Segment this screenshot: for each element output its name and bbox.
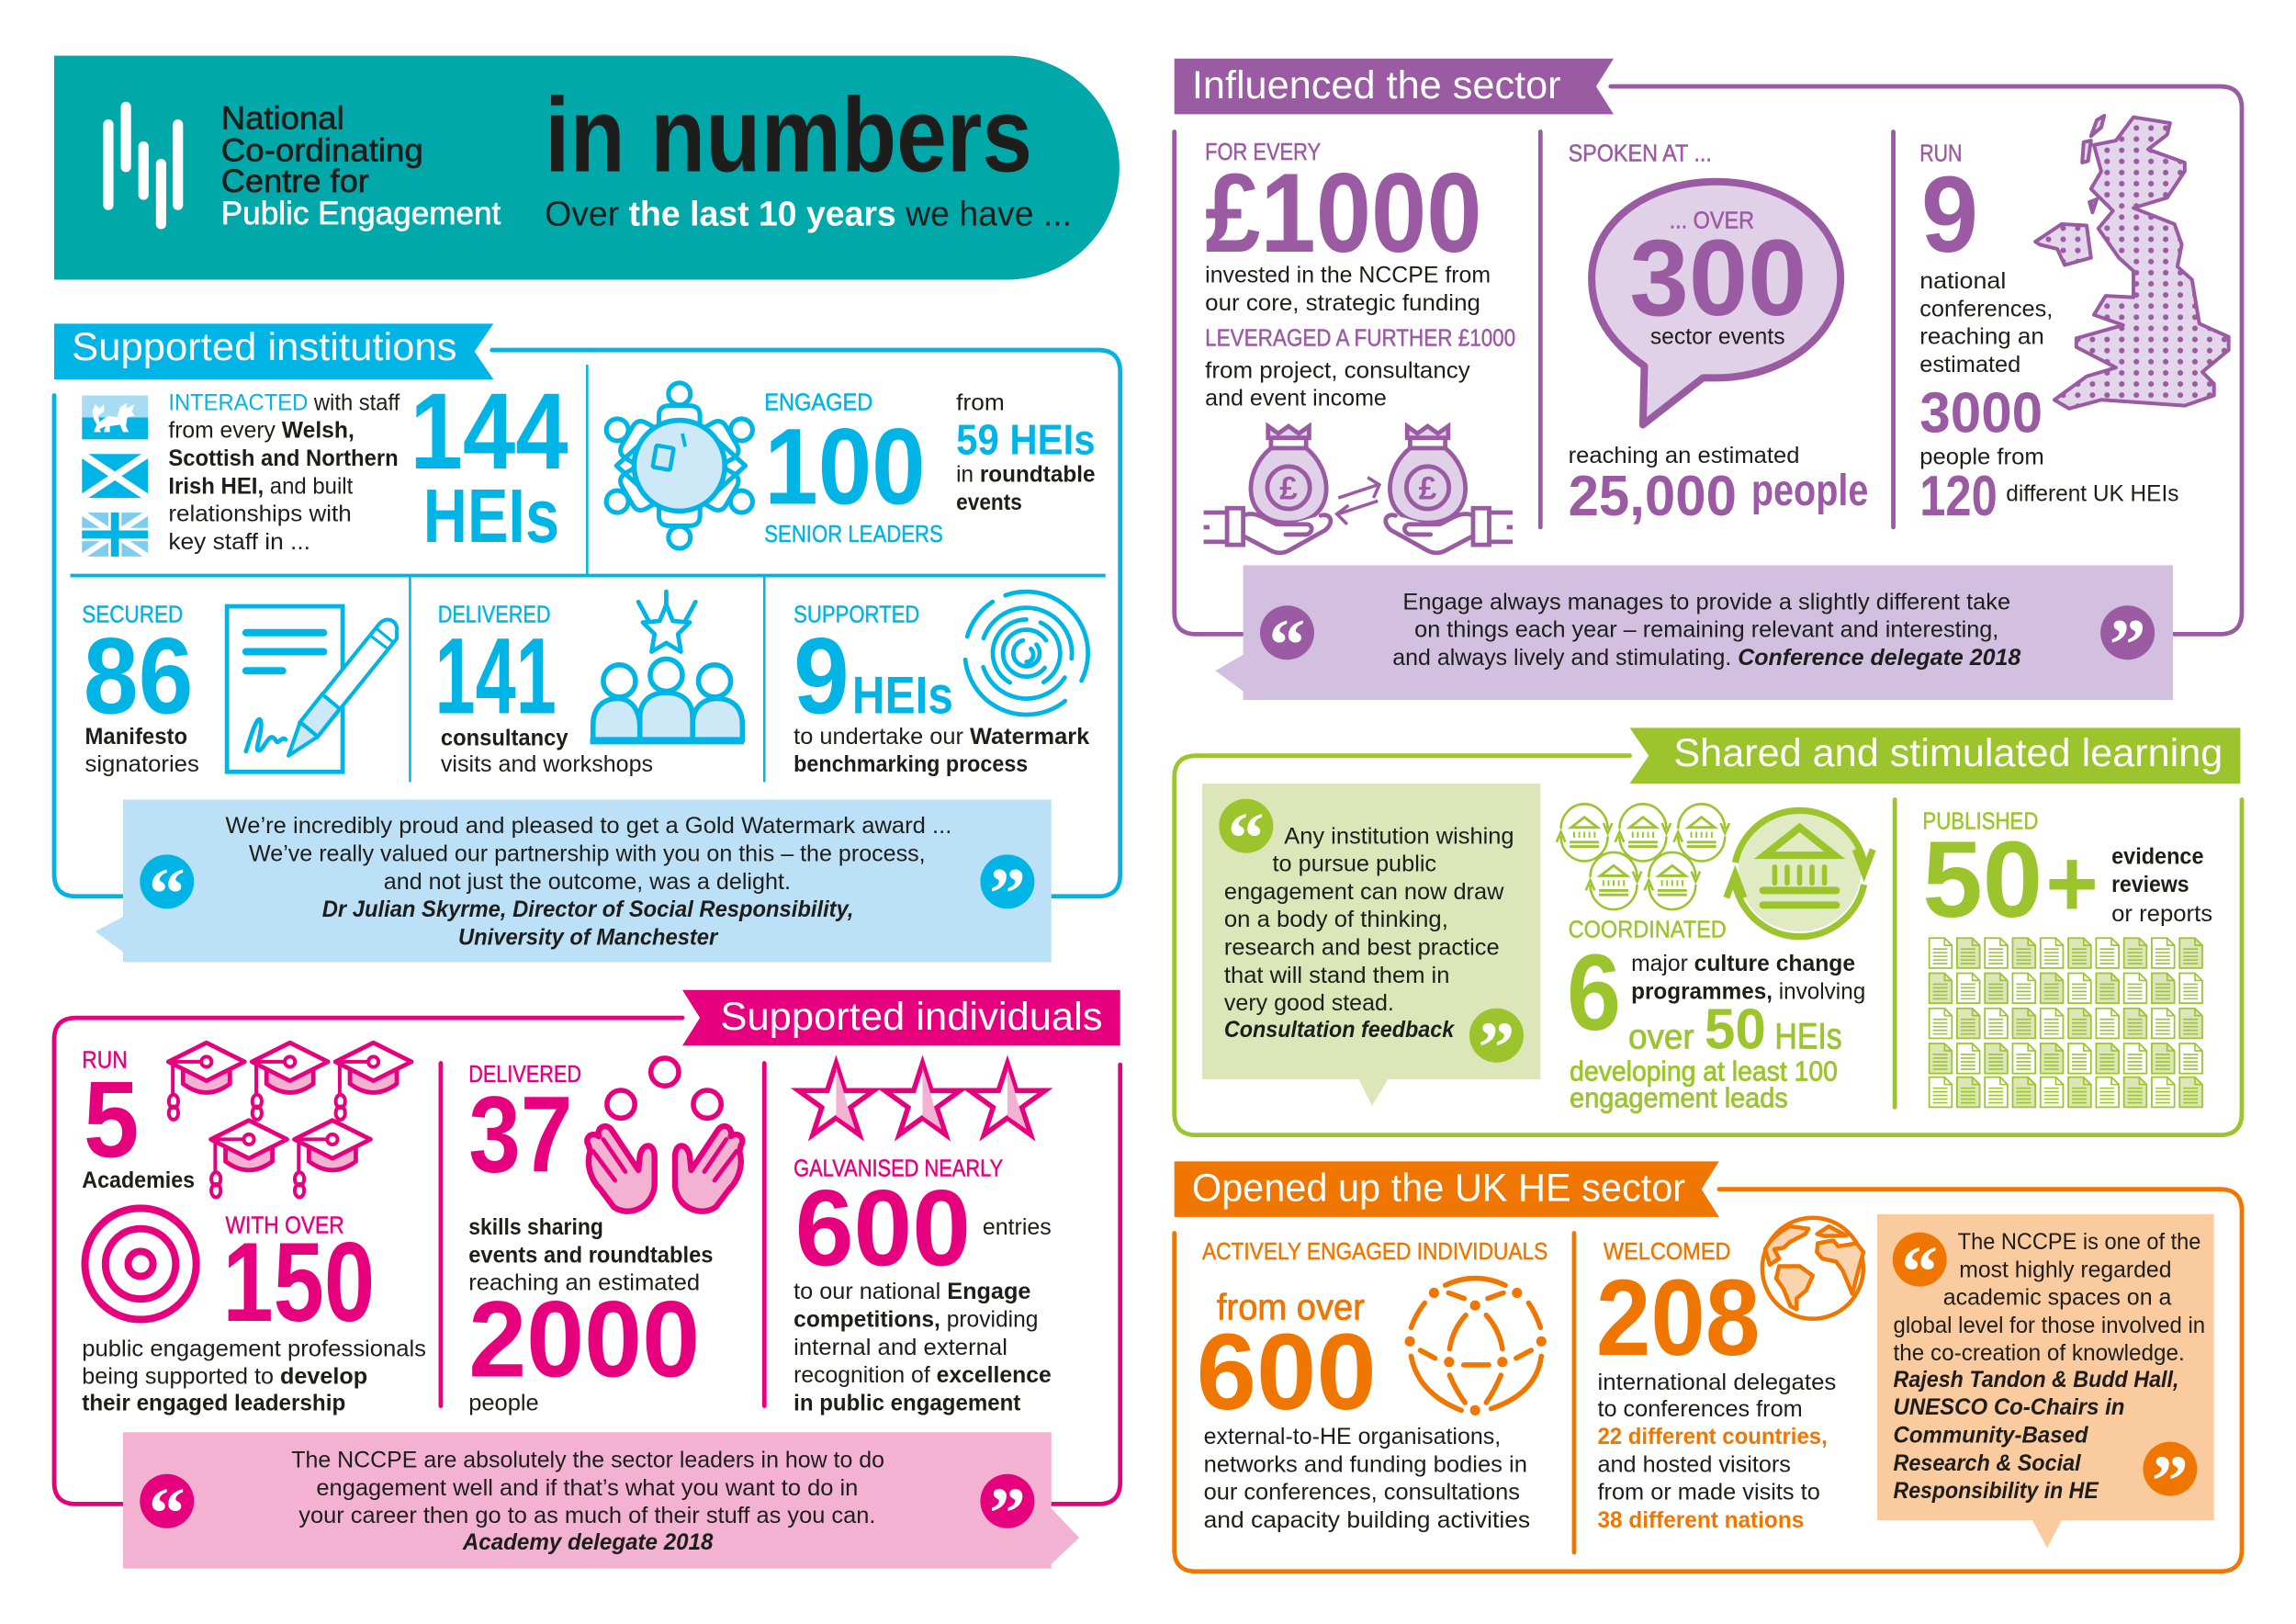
icon: roundtable — [598, 383, 761, 548]
quote text: the co-creation of knowledge. — [1894, 1341, 2185, 1366]
icon: money bags and hands — [1204, 426, 1513, 553]
stat: published 50+: 50 — [1922, 819, 2043, 941]
stat: delivered 141: 141 — [435, 615, 557, 737]
quote text: your career then go to as much of their stuff as you can. — [298, 1504, 875, 1528]
stat: for every £1000: £1000 — [1205, 151, 1482, 276]
number: 144 HEIs — [410, 371, 568, 558]
stat: delivered 141: visits and workshops — [441, 752, 653, 777]
quote text: engagement well and if that’s what you want to do in — [316, 1476, 858, 1501]
icon: document and pen — [227, 606, 397, 772]
stat: from over 600: external-to-HE organisations, — [1204, 1425, 1501, 1449]
quote text: We’ve really valued our partnership with you on this – the process, — [249, 841, 926, 866]
stat: delivered 37: events and roundtables — [468, 1243, 713, 1268]
stat: from over 600: from over — [1217, 1288, 1365, 1328]
text: interacted: Irish HEI, and built — [168, 474, 353, 499]
quote text: Dr Julian Skyrme, Director of Social Responsibility, — [322, 897, 854, 922]
stat: galvanised nearly 600: 600 — [795, 1168, 971, 1290]
stat: galvanised nearly 600: recognition of excellence — [793, 1363, 1052, 1388]
panel: supported individuals — [54, 990, 1120, 1569]
stat: run 5 academies — [82, 1047, 195, 1193]
stat: run 9 conferences — [1919, 141, 2178, 528]
quote marks — [1893, 1232, 2197, 1522]
stat: supported 9 HEIs: HEIs — [852, 666, 953, 725]
quote text: academic spaces on a — [1943, 1286, 2172, 1311]
quote text — [1224, 824, 1514, 1043]
text: interacted: from every Welsh, — [168, 419, 355, 444]
text: interacted: INTERACTED with staff — [168, 390, 400, 415]
stat: with over 150: their engaged leadership — [82, 1391, 345, 1415]
icon: juggling hands — [587, 1058, 742, 1212]
stat: with over 150: WITH OVER — [226, 1212, 344, 1238]
stat: secured 86 — [82, 603, 199, 777]
stat: engaged 100 senior leaders: ENGAGED — [764, 389, 872, 415]
stat: with over 150 — [82, 1212, 426, 1415]
stat: reaching 25,000 people: people — [1751, 467, 1868, 515]
quote text: We’re incredibly proud and pleased to get a Gold Watermark award ... — [226, 814, 951, 839]
stat: welcomed 208: WELCOMED — [1604, 1239, 1731, 1265]
stat: delivered 141: consultancy — [441, 727, 568, 751]
stat: welcomed 208: 208 — [1596, 1257, 1760, 1379]
stat: welcomed 208: from or made visits to — [1597, 1481, 1820, 1506]
text: interacted: Scottish and Northern — [168, 446, 399, 471]
quote marks — [1219, 798, 1524, 1088]
stat: coordinated 6: HEIs — [1774, 1017, 1842, 1057]
quote text: Research & Social — [1894, 1451, 2082, 1476]
organisation name: Co-ordinating — [221, 132, 423, 168]
quote text: Community-Based — [1894, 1423, 2088, 1448]
heading: supported individuals: Supported individuals — [720, 995, 1103, 1039]
stat: for every £1000: FOR EVERY — [1205, 140, 1321, 165]
stat: run 9 conferences: national — [1919, 269, 2006, 294]
text: interacted: key staff in ... — [168, 530, 310, 555]
quote text — [226, 814, 951, 950]
quote text: that will stand them in — [1224, 964, 1449, 988]
icon: fingerprint — [948, 574, 1105, 732]
stat: run 9 conferences: estimated — [1919, 353, 2020, 378]
icon: network globe — [1404, 1279, 1547, 1415]
stat: reaching 25,000 people: 25,000 — [1569, 465, 1737, 528]
stat: supported 9 HEIs: SUPPORTED — [793, 603, 919, 628]
icon: grid of documents — [1930, 938, 2202, 1107]
stat: run 9 conferences: reaching an — [1919, 325, 2044, 350]
quote text — [291, 1449, 884, 1555]
quote text: and always lively and stimulating. Conference delegate 2018 — [1392, 646, 2021, 671]
icon: university buildings — [1557, 804, 1873, 937]
speech bubble: over 300 sector events: 300 — [1630, 218, 1806, 339]
stat: galvanised nearly 600: to our national Engage — [793, 1280, 1030, 1304]
quote text: on a body of thinking, — [1224, 908, 1448, 932]
quote text: global level for those involved in — [1894, 1314, 2205, 1338]
stat: coordinated 6 — [1567, 917, 1865, 1113]
stat: supported 9 HEIs: to undertake our Watermark — [793, 725, 1089, 750]
text: interacted — [168, 390, 400, 555]
stat: from over 600: networks and funding bodies in — [1204, 1452, 1527, 1477]
title: in numbers — [545, 77, 1032, 195]
stat: supported 9 HEIs — [793, 603, 1089, 777]
icon: NCCPE logo — [108, 107, 178, 224]
quote text — [1894, 1230, 2205, 1504]
stat: coordinated 6: COORDINATED — [1569, 917, 1727, 942]
heading: influenced the sector: Influenced the sector — [1192, 63, 1561, 107]
stat: engaged 100 senior leaders: SENIOR LEADERS — [764, 522, 943, 547]
stat: from over 600: and capacity building activities — [1204, 1508, 1530, 1533]
quote text: UNESCO Co-Chairs in — [1894, 1395, 2124, 1420]
stat: published 50+ — [1922, 808, 2212, 941]
stat: welcomed 208 — [1596, 1239, 1836, 1533]
icon: three stars — [798, 1064, 1045, 1134]
stat: run 5 academies: RUN — [82, 1047, 128, 1073]
quote text: to pursue public — [1273, 852, 1436, 877]
panel: opened up the UK HE sector — [1175, 1161, 2242, 1572]
stat: for every £1000 — [1205, 140, 1515, 412]
stat: coordinated 6: developing at least 100 — [1570, 1057, 1838, 1088]
quote: consultation feedback — [1202, 784, 1540, 1106]
panel: shared and stimulated learning — [1175, 727, 2242, 1135]
quote text: very good stead. — [1224, 991, 1394, 1016]
stat: coordinated 6: over — [1628, 1018, 1694, 1057]
stat: run 5 academies: Academies — [82, 1168, 195, 1193]
quote text: University of Manchester — [458, 925, 719, 950]
quote text: Rajesh Tandon & Budd Hall, — [1894, 1368, 2178, 1393]
stat: coordinated 6: 50 — [1705, 998, 1766, 1062]
stat: engaged 100 senior leaders: 100 — [764, 406, 926, 527]
quote marks: “ — [149, 854, 186, 935]
organisation name: Centre for — [221, 164, 369, 199]
quote text: The NCCPE is one of the — [1958, 1230, 2200, 1255]
stat: published 50+: or reports — [2111, 902, 2212, 927]
stat: coordinated 6: 6 — [1567, 932, 1621, 1054]
quote marks: “ — [149, 1473, 186, 1554]
stat: from over 600 — [1197, 1239, 1548, 1533]
stat: reaching 25,000 people: reaching an estimated — [1569, 444, 1799, 468]
quote text: Engage always manages to provide a slightly different take — [1402, 590, 2010, 615]
stat: delivered 37: 37 — [468, 1074, 572, 1195]
stat: galvanised nearly 600: GALVANISED NEARLY — [793, 1156, 1003, 1181]
organisation name: Public Engagement — [221, 196, 501, 231]
stat: coordinated 6: major culture change — [1631, 952, 1855, 976]
stat: published 50+: evidence — [2111, 845, 2204, 870]
icon: graduation caps — [168, 1043, 411, 1197]
stat: run 9 conferences: RUN — [1919, 141, 1962, 166]
speech bubble: over 300 sector events — [1592, 182, 1840, 424]
panel: supported institutions — [54, 323, 1120, 963]
stat: for every £1000: LEVERAGED A FURTHER £1000 — [1205, 325, 1515, 351]
icon: star above people — [591, 592, 744, 741]
number: 144 HEIs: HEIs — [423, 473, 559, 558]
heading: influenced the sector — [1175, 59, 1614, 114]
stat: with over 150: being supported to develop — [82, 1365, 367, 1390]
quote marks: ” — [989, 1473, 1026, 1554]
speech bubble: over 300 sector events: sector events — [1650, 325, 1785, 350]
quote marks: ” — [1479, 1008, 1514, 1088]
stat: for every £1000: our core, strategic funding — [1205, 291, 1480, 316]
number: 144 HEIs: 144 — [410, 371, 568, 492]
stat: secured 86: SECURED — [82, 603, 183, 628]
heading: supported institutions — [54, 323, 493, 379]
quote text — [1392, 590, 2021, 671]
stat: welcomed 208: and hosted visitors — [1597, 1452, 1791, 1477]
panel: influenced the sector — [1175, 59, 2242, 700]
quote text: Consultation feedback — [1224, 1018, 1455, 1043]
stat: delivered 141 — [435, 603, 653, 777]
stat: delivered 37: DELIVERED — [468, 1062, 581, 1088]
stat: published 50+: reviews — [2111, 873, 2189, 897]
stat: run 9 conferences: conferences, — [1919, 297, 2053, 321]
stat: delivered 37: skills sharing — [468, 1215, 603, 1240]
quote marks: “ — [1228, 798, 1265, 879]
stat: for every £1000: and event income — [1205, 387, 1387, 412]
icon: flags of Wales, Scotland, UK — [82, 395, 148, 557]
quote marks: ” — [2152, 1441, 2189, 1522]
stat: delivered 37: reaching an estimated — [468, 1271, 700, 1296]
stat: galvanised nearly 600: in public engagement — [793, 1391, 1020, 1415]
quote text: Academy delegate 2018 — [462, 1530, 714, 1555]
organisation name: National — [221, 100, 344, 136]
stat: delivered 37: 2000 — [468, 1280, 700, 1401]
stat: welcomed 208: 38 different nations — [1597, 1508, 1804, 1533]
stat: published 50+: + — [2045, 830, 2099, 938]
stat: welcomed 208: to conferences from — [1597, 1397, 1803, 1422]
stat: galvanised nearly 600: internal and external — [793, 1336, 1007, 1360]
stat: from 59 HEIs: events — [956, 491, 1022, 515]
stat: coordinated 6: engagement leads — [1570, 1083, 1788, 1113]
stat: delivered 37 — [468, 1062, 713, 1415]
stat: run 9 conferences: different UK HEIs — [2006, 481, 2178, 506]
stat: from 59 HEIs: 59 HEIs — [956, 415, 1096, 463]
stat: from 59 HEIs — [956, 390, 1096, 515]
quote: conference delegate — [1215, 565, 2173, 700]
stat: published 50+: PUBLISHED — [1922, 808, 2038, 834]
quote marks: ” — [989, 854, 1026, 935]
quote marks: “ — [1269, 605, 1305, 686]
stat: with over 150: public engagement professionals — [82, 1336, 426, 1361]
stat: galvanised nearly 600: entries — [983, 1215, 1052, 1240]
quote text: most highly regarded — [1959, 1257, 2171, 1282]
header banner — [54, 56, 1120, 280]
icon: earth globe — [1762, 1218, 1863, 1319]
stat: secured 86: 86 — [84, 615, 193, 737]
quote text: Responsibility in HE — [1894, 1479, 2099, 1504]
stat: welcomed 208: 22 different countries, — [1597, 1425, 1828, 1449]
icon: money bags and hands: £ — [1419, 471, 1437, 507]
stat: run 9 conferences: 120 — [1919, 465, 1998, 528]
heading: supported institutions: Supported institutions — [72, 325, 456, 369]
quote text: and not just the outcome, was a delight. — [384, 870, 791, 895]
stat: delivered 141: DELIVERED — [438, 603, 550, 628]
stat: from 59 HEIs: in roundtable — [956, 463, 1096, 488]
stat: reaching 25,000 people — [1569, 444, 1868, 528]
stat: supported 9 HEIs: benchmarking process — [793, 752, 1028, 777]
stat: run 9 conferences: 9 — [1921, 154, 1978, 276]
stat: supported 9 HEIs: 9 — [793, 615, 850, 737]
stat: run 9 conferences: 3000 — [1919, 381, 2043, 445]
stat: galvanised nearly 600: competitions, providing — [793, 1308, 1038, 1333]
quote marks — [140, 854, 1034, 935]
subtitle: Over the last 10 years we have ... — [545, 195, 1072, 234]
stat: coordinated 6: programmes, involving — [1631, 979, 1865, 1004]
stat: from over 600: our conferences, consultations — [1204, 1481, 1520, 1506]
quote: Dr Julian Skyrme — [96, 800, 1052, 963]
heading: opened up the UK HE sector: Opened up the UK HE sector — [1192, 1166, 1685, 1210]
quote marks — [1260, 605, 2155, 686]
stat: from 59 HEIs: from — [956, 390, 1005, 415]
stat: for every £1000: invested in the NCCPE from — [1205, 264, 1491, 288]
icon: UK map — [2035, 116, 2229, 409]
quote: Academy delegate — [123, 1432, 1079, 1569]
stat: run 5 academies: 5 — [84, 1060, 139, 1181]
text: interacted: relationships with — [168, 502, 352, 527]
quote marks: “ — [1901, 1232, 1938, 1313]
speech bubble: over 300 sector events: ... OVER — [1670, 209, 1754, 234]
stat: delivered 37: people — [468, 1391, 539, 1415]
stat: galvanised nearly 600 — [793, 1156, 1052, 1415]
quote text: on things each year – remaining relevant and interesting, — [1414, 618, 1998, 643]
quote text: The NCCPE are absolutely the sector leaders in how to do — [291, 1449, 884, 1473]
heading: shared and stimulated learning: Shared and stimulated learning — [1673, 731, 2223, 775]
quote text: Any institution wishing — [1284, 824, 1514, 849]
quote marks — [140, 1473, 1034, 1554]
stat: welcomed 208: international delegates — [1597, 1370, 1836, 1395]
stat: from over 600: ACTIVELY ENGAGED INDIVIDUALS — [1202, 1239, 1548, 1265]
quote text: research and best practice — [1224, 936, 1500, 961]
organisation name — [221, 100, 501, 231]
quote text: engagement can now draw — [1224, 880, 1504, 905]
quote: Rajesh Tandon and Budd Hall — [1877, 1214, 2214, 1548]
stat: with over 150: 150 — [222, 1220, 375, 1346]
quote marks: ” — [2110, 605, 2146, 686]
icon: target — [84, 1208, 197, 1320]
stat: secured 86: Manifesto — [84, 725, 187, 750]
stat: for every £1000: from project, consultancy — [1205, 358, 1470, 383]
icon: money bags and hands: £ — [1279, 471, 1298, 507]
stat: spoken at: SPOKEN AT ... — [1569, 141, 1712, 166]
stat: from over 600: 600 — [1197, 1312, 1377, 1433]
heading: supported individuals — [682, 990, 1120, 1045]
stat: run 9 conferences: people from — [1919, 445, 2044, 469]
stat: secured 86: signatories — [84, 752, 199, 777]
